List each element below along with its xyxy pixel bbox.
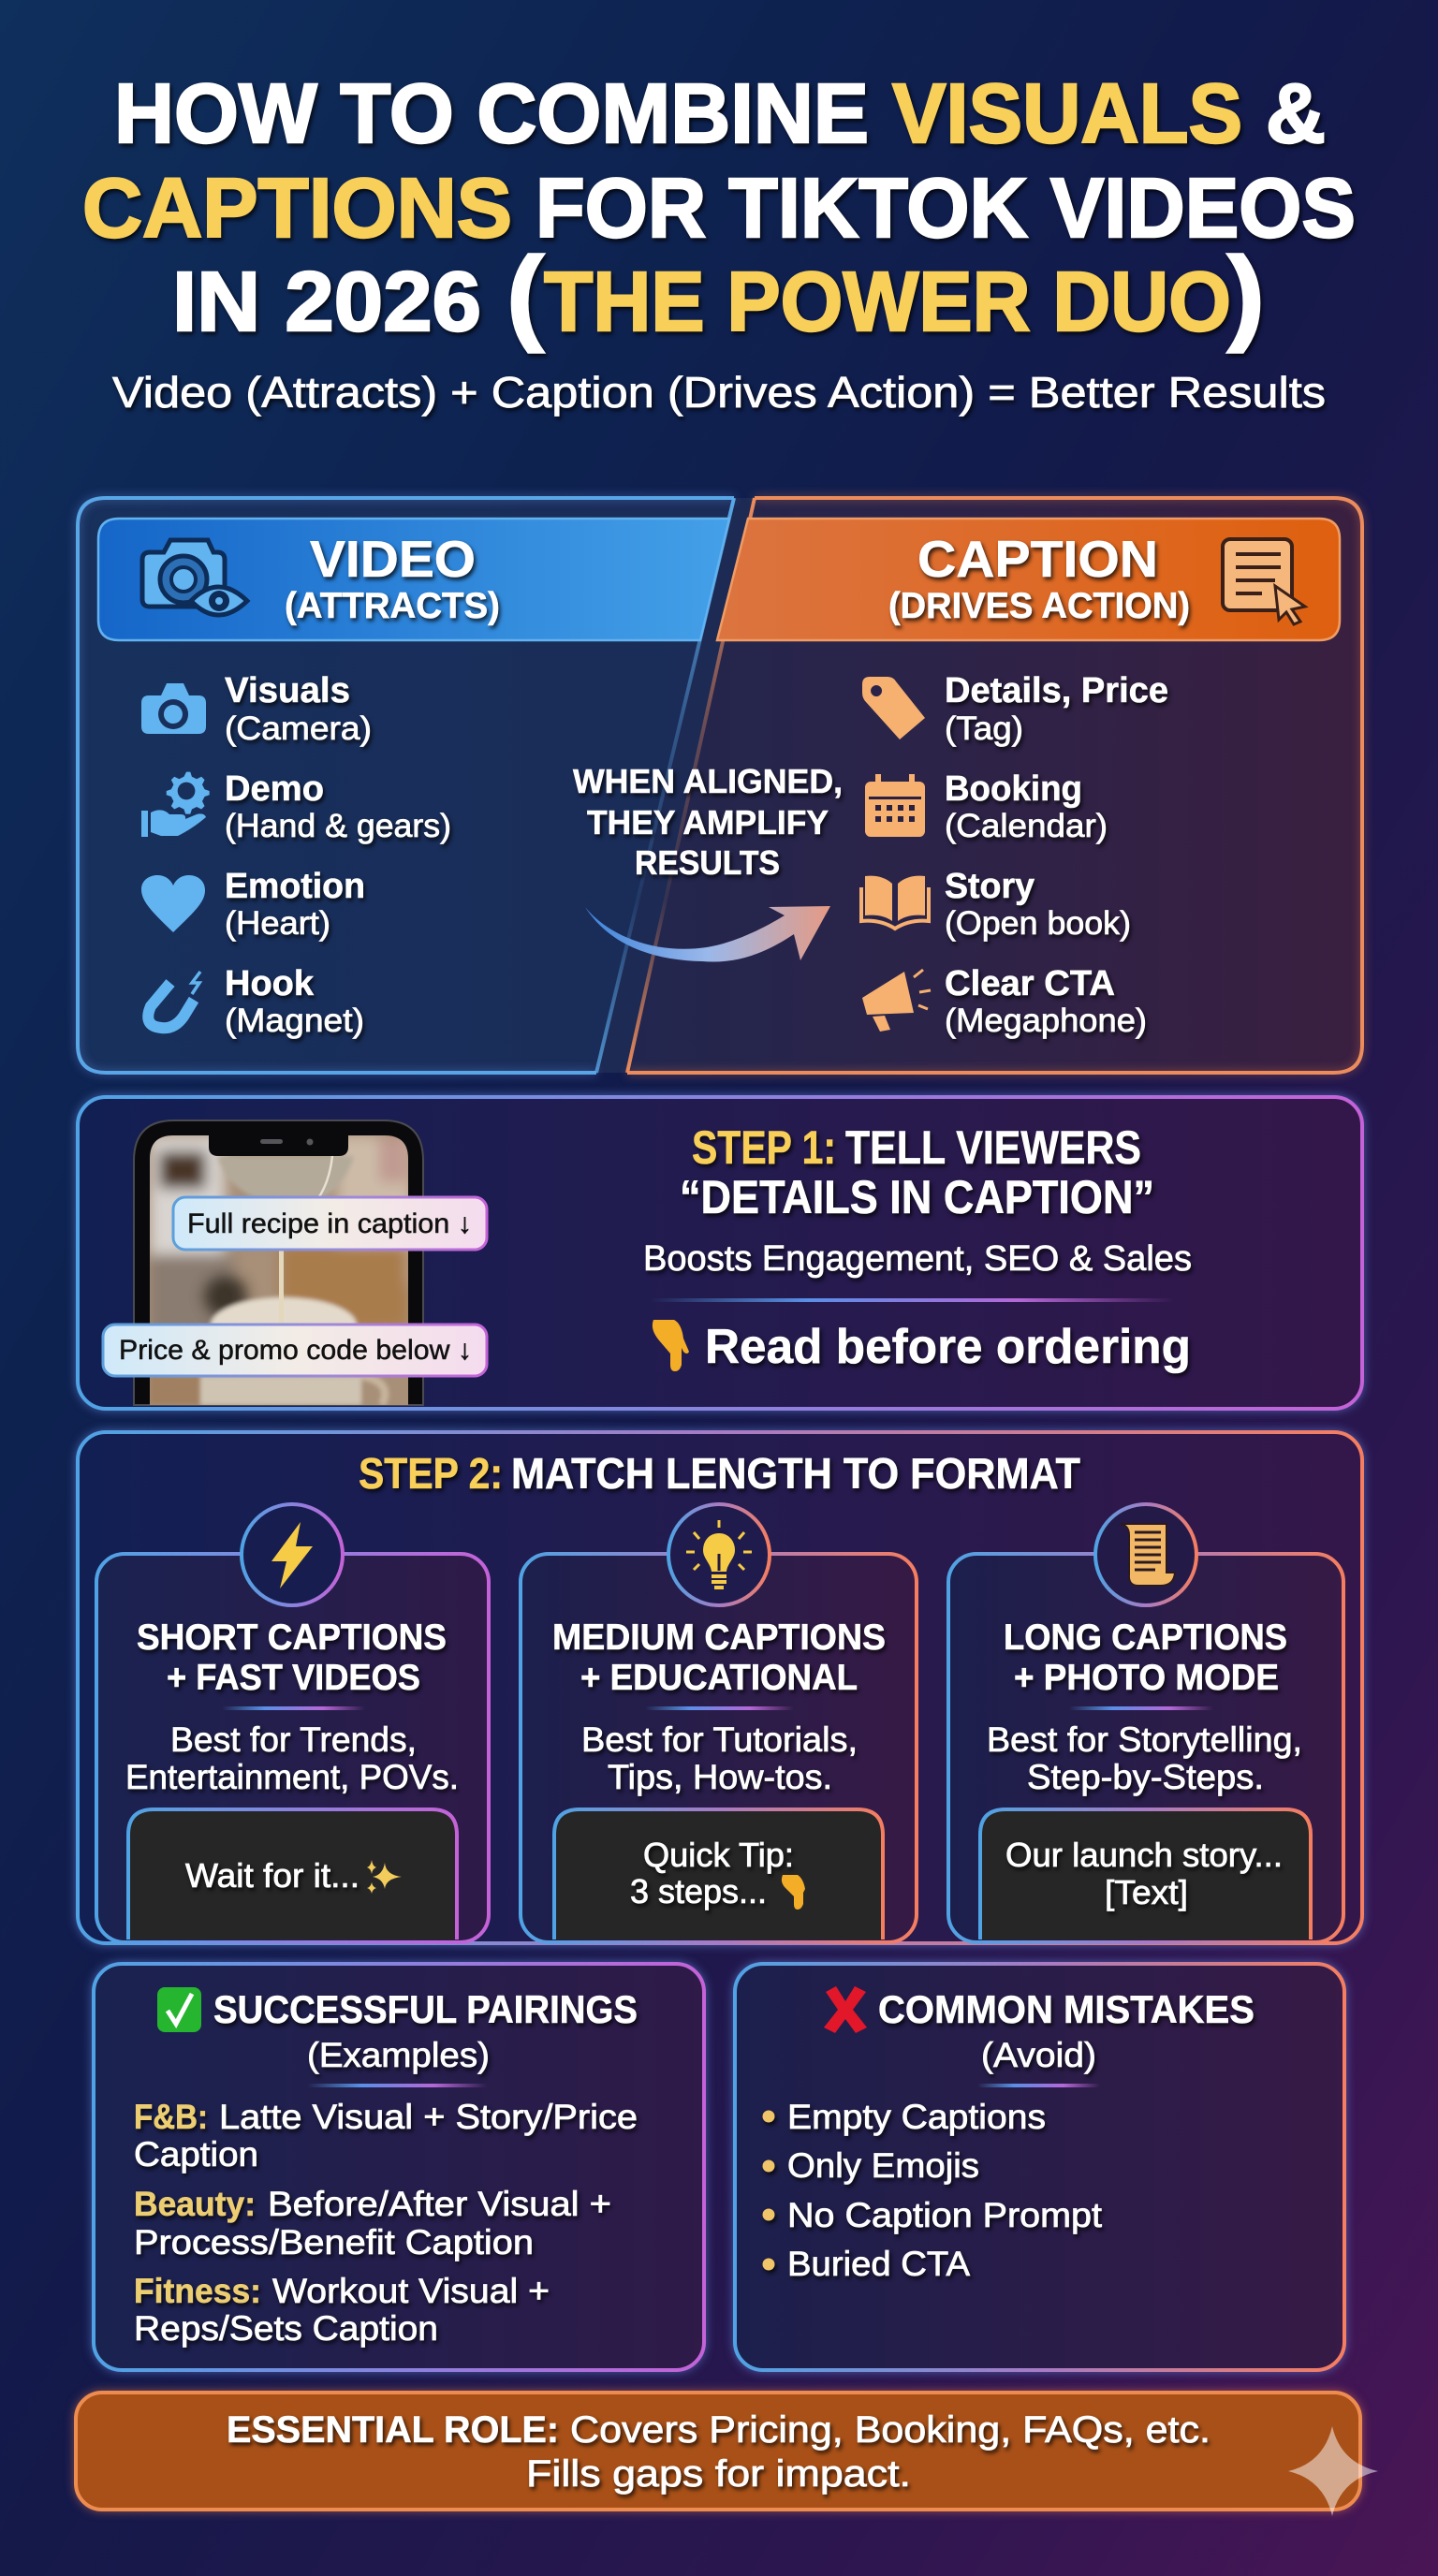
item: booking — [865, 769, 1108, 844]
item: clear cta: Clear CTA — [945, 964, 1115, 1003]
arrow: video to caption — [585, 906, 830, 962]
caption example — [554, 1809, 883, 1939]
icon: magnet — [148, 972, 200, 1028]
examples list: Latte Visual + Story/Price — [219, 2098, 638, 2136]
item: details price: Details, Price — [945, 671, 1168, 710]
icon: megaphone — [862, 970, 931, 1032]
heading: successful pairings — [213, 1987, 638, 2074]
caption example — [128, 1809, 457, 1939]
phone mockup — [134, 1120, 423, 1409]
item: clear cta — [862, 964, 1147, 1039]
item: clear cta: (Megaphone) — [945, 1003, 1147, 1039]
item: hook: (Magnet) — [225, 1003, 364, 1039]
card: short captions — [96, 1504, 489, 1942]
heading: step 1: “DETAILS IN CAPTION” — [680, 1171, 1154, 1223]
icon: hand and gear — [141, 772, 210, 837]
examples list: Process/Benefit Caption — [134, 2223, 534, 2261]
icon: check mark — [157, 1987, 201, 2032]
card heading: LONG CAPTIONS — [1004, 1617, 1287, 1658]
card description — [987, 1720, 1302, 1796]
card description: Best for Storytelling, — [987, 1720, 1302, 1759]
caption example: Wait for it... — [185, 1856, 360, 1895]
card: medium captions — [521, 1504, 917, 1942]
heading: caption — [888, 530, 1190, 626]
title: IN 2026 — [172, 256, 481, 349]
item: visuals — [141, 671, 372, 747]
item: demo: Demo — [225, 769, 324, 809]
icon: camera — [141, 683, 206, 734]
panel: caption side — [627, 498, 1362, 1073]
item: booking: (Calendar) — [945, 808, 1108, 844]
examples list — [134, 2098, 638, 2348]
title: THE POWER DUO — [544, 256, 1231, 349]
item: hook — [148, 964, 364, 1039]
examples list: Before/After Visual + — [268, 2185, 611, 2223]
icon: tag — [862, 677, 925, 739]
label: price and promo — [103, 1325, 487, 1376]
card heading — [1004, 1617, 1287, 1698]
examples list: Workout Visual + — [272, 2272, 550, 2310]
item: emotion — [141, 867, 365, 942]
icon: open book — [861, 876, 929, 929]
examples list: F&B: — [134, 2098, 208, 2136]
photo: coffee pour — [150, 1135, 408, 1405]
title: CAPTIONS — [82, 162, 512, 256]
icon: calendar — [865, 774, 925, 837]
heading: caption: (DRIVES ACTION) — [888, 586, 1190, 626]
heading: common mistakes: COMMON MISTAKES — [878, 1987, 1255, 2031]
panel: video side — [78, 498, 734, 1073]
heading: common mistakes: (Avoid) — [981, 2036, 1096, 2074]
panel: common mistakes — [735, 1964, 1344, 2370]
icon: heart — [141, 875, 205, 932]
examples list: Reps/Sets Caption — [134, 2309, 438, 2348]
caption example: Quick Tip: — [643, 1836, 794, 1874]
item: story: (Open book) — [945, 905, 1131, 942]
item: emotion: (Heart) — [225, 905, 330, 942]
label: full recipe: Full recipe in caption ↓ — [187, 1208, 472, 1239]
list: caption attributes — [861, 671, 1168, 1039]
callout: when aligned: RESULTS — [635, 843, 780, 882]
card heading: MEDIUM CAPTIONS — [552, 1617, 886, 1658]
heading: successful pairings: SUCCESSFUL PAIRINGS — [213, 1987, 638, 2031]
item: details price — [862, 671, 1168, 747]
card: long captions — [948, 1504, 1343, 1942]
icon: sparkle watermark — [1288, 2426, 1378, 2516]
item: demo — [141, 769, 451, 844]
item: hook: Hook — [225, 964, 315, 1003]
heading: video — [285, 530, 500, 626]
panel: successful pairings — [94, 1964, 704, 2370]
item: story: Story — [945, 867, 1034, 906]
banner: essential role: ESSENTIAL ROLE: — [227, 2409, 559, 2451]
banner: essential role: Covers Pricing, Booking, FAQs, etc. — [570, 2409, 1211, 2451]
heading: step 1: TELL VIEWERS — [845, 1121, 1141, 1174]
phone notch — [209, 1128, 348, 1156]
card description — [581, 1720, 858, 1796]
item: story — [861, 867, 1131, 942]
panel: step 1 — [78, 1097, 1362, 1409]
heading: video: VIDEO — [310, 530, 476, 588]
text: read before ordering: Read before ordering — [705, 1320, 1191, 1374]
heading: step 2: MATCH LENGTH TO FORMAT — [511, 1449, 1080, 1498]
examples list: Caption — [134, 2135, 258, 2174]
heading: successful pairings: (Examples) — [307, 2036, 490, 2074]
mistakes list: No Caption Prompt — [787, 2196, 1103, 2234]
caption example — [980, 1809, 1311, 1939]
icon: light bulb — [668, 1504, 770, 1605]
caption example: [Text] — [1105, 1873, 1188, 1911]
callout: when aligned — [573, 762, 843, 882]
icon: red cross — [824, 1986, 867, 2033]
item: booking: Booking — [945, 769, 1082, 809]
icon: scroll — [1095, 1504, 1196, 1605]
label: full recipe — [173, 1197, 487, 1250]
card description: Best for Trends, — [170, 1720, 417, 1759]
callout: when aligned: WHEN ALIGNED, — [573, 762, 843, 800]
title: FOR TIKTOK VIDEOS — [536, 162, 1356, 256]
mistakes list: Buried CTA — [787, 2245, 970, 2283]
heading: video: (ATTRACTS) — [285, 586, 500, 626]
header: caption — [717, 519, 1340, 640]
heading: step 2: STEP 2: — [359, 1449, 503, 1498]
banner: essential role: Fills gaps for impact. — [526, 2453, 911, 2495]
examples list: Fitness: — [134, 2272, 261, 2310]
icon: document with cursor — [1223, 539, 1305, 624]
title: ) — [1227, 236, 1265, 353]
card description: Tips, How-tos. — [608, 1758, 832, 1796]
card heading — [137, 1617, 447, 1698]
item: visuals: (Camera) — [225, 710, 372, 747]
mistakes list: Empty Captions — [787, 2098, 1046, 2136]
callout: when aligned: THEY AMPLIFY — [587, 803, 829, 842]
title — [82, 67, 1356, 353]
title: ( — [506, 236, 545, 353]
icon: camera with eye — [142, 540, 247, 615]
card description: Best for Tutorials, — [581, 1720, 858, 1759]
card description: Entertainment, POVs. — [125, 1758, 459, 1796]
item: details price: (Tag) — [945, 710, 1023, 747]
heading: step 1: STEP 1: — [692, 1121, 836, 1174]
banner: essential role — [76, 2393, 1360, 2510]
mistakes list — [762, 2098, 1103, 2283]
card heading: + PHOTO MODE — [1014, 1658, 1279, 1698]
card description: Step-by-Steps. — [1027, 1758, 1264, 1796]
item: demo: (Hand & gears) — [225, 808, 451, 844]
mistakes list: Only Emojis — [787, 2146, 979, 2185]
card heading: + FAST VIDEOS — [167, 1658, 420, 1698]
title: HOW TO COMBINE — [114, 67, 869, 161]
title: & — [1266, 67, 1326, 161]
panel: video vs caption — [78, 498, 1362, 1073]
title: VISUALS — [892, 67, 1242, 161]
icon: pointing down — [653, 1320, 689, 1371]
heading: caption: CAPTION — [917, 530, 1158, 588]
subtitle: Video (Attracts) + Caption (Drives Action) = Better Results — [112, 368, 1326, 417]
label: price and promo: Price & promo code below ↓ — [119, 1335, 472, 1366]
card heading: + EDUCATIONAL — [580, 1658, 858, 1698]
list: video attributes — [141, 671, 451, 1039]
caption example: Our launch story... — [1005, 1836, 1283, 1874]
text: boosts: Boosts Engagement, SEO & Sales — [643, 1239, 1192, 1279]
card description — [125, 1720, 459, 1796]
examples list: Beauty: — [134, 2185, 256, 2223]
panel: step 2 — [78, 1432, 1362, 1943]
header: video — [98, 519, 729, 640]
card heading — [552, 1617, 886, 1698]
item: visuals: Visuals — [225, 671, 350, 710]
card heading: SHORT CAPTIONS — [137, 1617, 447, 1658]
icon: lightning bolt — [242, 1504, 343, 1605]
caption example: 3 steps... — [630, 1872, 767, 1910]
item: emotion: Emotion — [225, 867, 365, 906]
heading: common mistakes — [878, 1987, 1255, 2074]
heading: step 1 — [680, 1121, 1154, 1223]
